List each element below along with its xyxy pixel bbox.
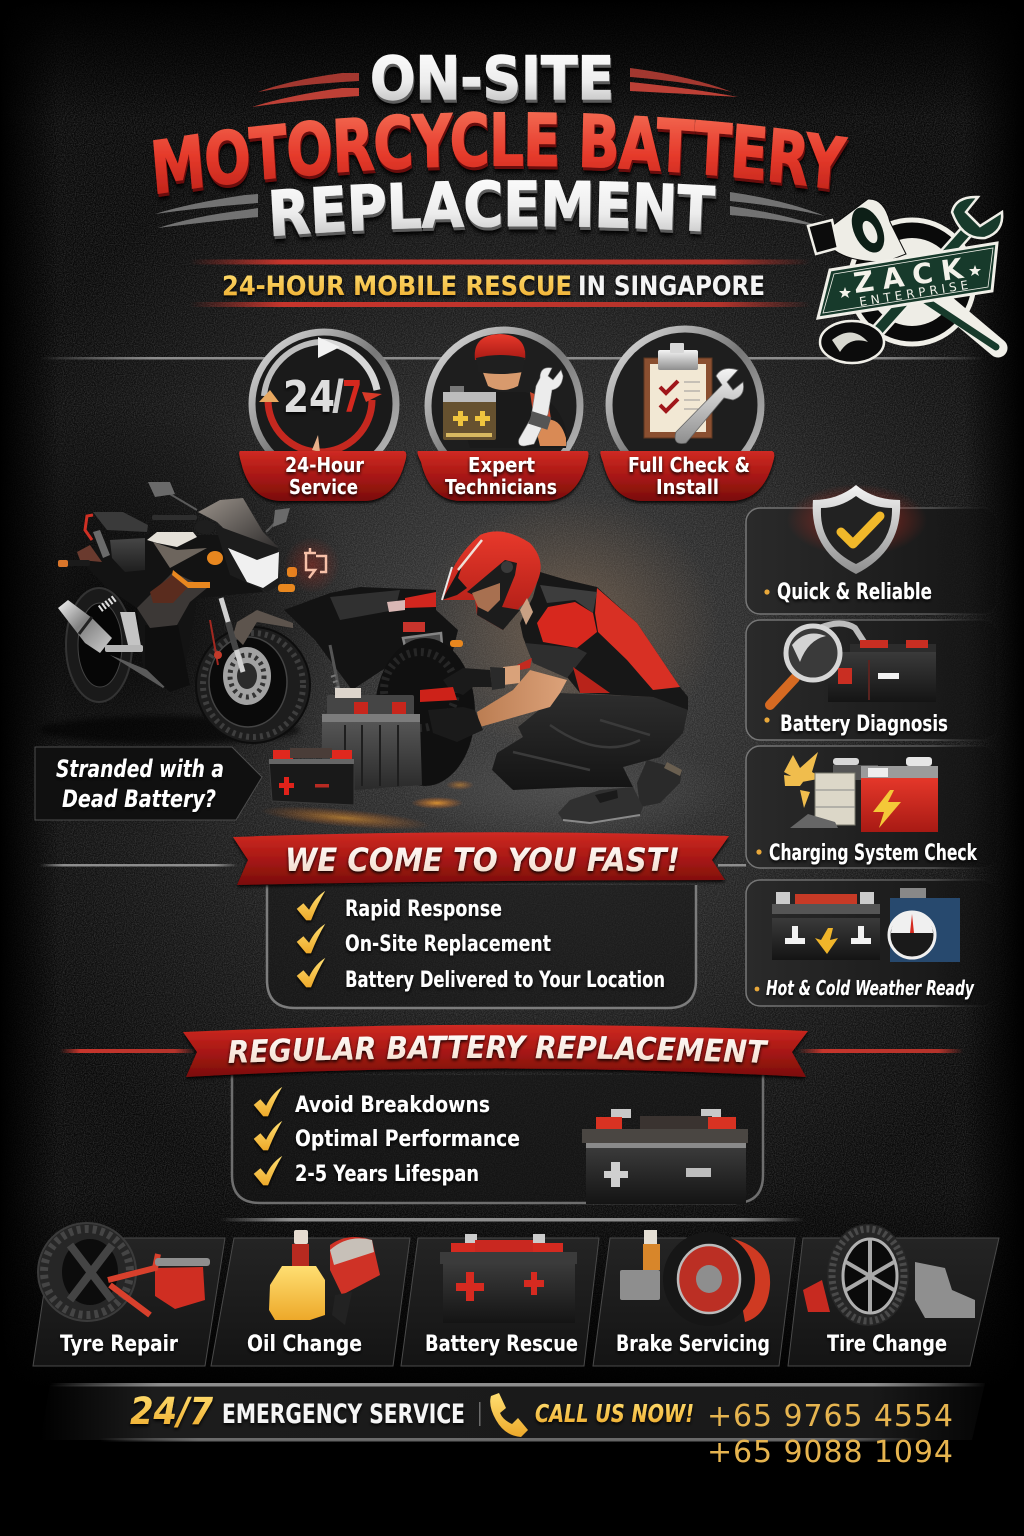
back boot — [637, 760, 682, 807]
near arm — [477, 670, 567, 727]
exhaust — [58, 600, 112, 653]
lower red — [573, 667, 610, 693]
card: Battery Rescue — [401, 1234, 599, 1366]
badge: 24-Hour Service — [239, 332, 406, 501]
heading: REPLACEMENT: REPLACEMENT — [271, 180, 718, 244]
upper white fairing — [147, 532, 197, 547]
grey shoulder — [540, 585, 597, 613]
grey glossy fairing — [137, 572, 207, 628]
fork — [221, 598, 243, 672]
badge: 24-Hour Service: / — [332, 370, 344, 422]
icon: clock arrows — [259, 337, 382, 452]
nose — [215, 525, 280, 592]
far arm — [503, 665, 520, 685]
subtitle band: IN SINGAPORE — [578, 271, 765, 302]
divider above services — [220, 1218, 805, 1222]
windshield — [198, 498, 278, 553]
panel: Battery Diagnosis — [746, 620, 996, 740]
badge: 24-Hour Service: Service — [289, 475, 358, 499]
tool: piston and handle — [808, 199, 998, 348]
card: Tire Change — [788, 1224, 999, 1366]
card: Brake Servicing — [593, 1230, 795, 1366]
battery: small — [269, 748, 354, 805]
emergency text: 24/7 — [130, 1390, 213, 1433]
logo banner — [818, 243, 997, 318]
shock — [100, 598, 115, 609]
badge: Full Check & Install: Install — [656, 475, 719, 499]
panel: benefits — [232, 1075, 763, 1204]
tool: wrench — [874, 197, 1002, 335]
shirt base — [520, 572, 688, 710]
grab rail — [85, 515, 93, 540]
banner: regular battery replacement: REGULAR BATTERY REPLACEMENT — [226, 1034, 770, 1067]
check items — [297, 891, 325, 987]
logo: Zack Enterprise: ENTERPRISE — [858, 278, 969, 309]
panel: checklist: Rapid Response — [345, 897, 502, 922]
icon: battery — [465, 1234, 477, 1244]
red back panel — [595, 588, 680, 690]
far sleeve — [517, 658, 532, 670]
contact bar: EMERGENCY SERVICE — [222, 1399, 465, 1430]
orange indicators — [172, 551, 297, 592]
tail panel — [77, 545, 102, 562]
panel: Charging System Check — [746, 746, 996, 868]
panel: Hot & Cold Weather Ready — [746, 880, 996, 1006]
parked rear of second bike — [284, 587, 475, 786]
badge: 24-Hour Service: 7 — [342, 372, 362, 423]
logo wordmark: ZACK — [851, 252, 966, 300]
panel: Battery Diagnosis: Battery Diagnosis — [780, 712, 948, 737]
banner: we come to you fast — [233, 832, 729, 885]
badge: Expert Technicians: Technicians — [445, 475, 557, 499]
panel: Quick & Reliable — [746, 484, 996, 614]
grey swooshes beside REPLACEMENT — [155, 192, 825, 228]
seat — [93, 512, 148, 532]
icon: magnifier and battery — [815, 623, 866, 645]
ring behind tools — [850, 220, 974, 344]
mirrors — [148, 482, 290, 532]
contact bar: CALL US NOW! — [535, 1399, 694, 1428]
panel: checklist: On-Site Replacement — [345, 932, 551, 957]
warm light behind mechanic — [420, 495, 720, 755]
icon: phone — [490, 1393, 528, 1437]
floor tone — [400, 740, 740, 840]
contact bar — [40, 1383, 985, 1470]
panel: Quick & Reliable: Quick & Reliable — [777, 580, 932, 605]
rear wheel — [66, 588, 132, 702]
callout: stranded: Dead Battery? — [62, 785, 216, 813]
subtitle band — [190, 260, 810, 307]
battery: large — [322, 688, 422, 790]
motorcycle — [40, 482, 310, 744]
subtitle band: 24-HOUR MOBILE RESCUE — [222, 271, 572, 302]
headlight — [228, 548, 279, 588]
callout: stranded — [35, 747, 262, 820]
red speed swooshes beside ON-SITE — [252, 68, 738, 107]
belly pan — [110, 655, 172, 688]
banner: we come to you fast: WE COME TO YOU FAST! — [285, 841, 680, 879]
section: we come to you fast — [40, 832, 746, 1008]
logo: Zack Enterprise — [808, 197, 1002, 363]
badge: 24-Hour Service: 24 — [283, 372, 335, 423]
side feature panels — [746, 484, 996, 1006]
badge: Expert Technicians — [417, 330, 588, 501]
services row — [33, 1223, 999, 1366]
footpeg and bracket — [120, 612, 142, 652]
silver divider — [40, 357, 985, 360]
feature badges — [239, 329, 774, 501]
card: Tyre Repair — [33, 1223, 225, 1366]
card: Brake Servicing: Brake Servicing — [616, 1332, 770, 1357]
icon: battery warning light — [284, 537, 340, 593]
red chest panel — [537, 602, 597, 648]
callout: stranded: Stranded with a — [56, 755, 224, 783]
badge: 24-Hour Service: 24-Hour — [285, 453, 364, 477]
icon: oil bottle — [294, 1230, 308, 1244]
badge: Full Check & Install — [600, 329, 774, 501]
icon: wheel and jack — [803, 1280, 830, 1312]
icon: battery and gauge — [776, 892, 790, 904]
tail and main black body — [80, 535, 263, 692]
heading: MOTORCYCLE BATTERY: MOTORCYCLE BATTERY — [153, 111, 850, 200]
panel: benefits: 2-5 Years Lifespan — [295, 1162, 479, 1187]
title block — [153, 44, 850, 244]
handlebar — [152, 515, 197, 520]
front wheel — [196, 627, 310, 743]
lower glove — [428, 707, 483, 742]
icon: brake disc — [730, 1238, 770, 1322]
icon: shield — [813, 485, 900, 574]
card: Oil Change — [211, 1230, 410, 1366]
card: Tire Change: Tire Change — [827, 1332, 947, 1357]
front fender — [233, 610, 293, 645]
mechanic — [420, 531, 688, 823]
icon: charging system — [784, 752, 823, 808]
icon: technician — [443, 334, 567, 448]
upper glove — [443, 668, 492, 695]
helmet — [442, 531, 541, 630]
battery — [443, 398, 496, 440]
red terminal tool — [420, 687, 457, 702]
tool: helmet outline — [820, 321, 884, 363]
wrench held — [519, 368, 563, 446]
icon: tyre and tool — [38, 1223, 136, 1321]
trousers — [492, 693, 688, 790]
sleeve — [525, 643, 587, 678]
badge: Expert Technicians: Expert — [468, 453, 535, 477]
panel: benefits: Optimal Performance — [295, 1127, 520, 1152]
badge: Full Check & Install: Full Check & — [628, 453, 750, 477]
panel: checklist — [267, 885, 696, 1008]
section: regular battery replacement — [61, 1024, 962, 1204]
front boot — [558, 787, 643, 823]
panel: benefits: Avoid Breakdowns — [295, 1093, 490, 1118]
banner: regular battery replacement — [183, 1024, 808, 1080]
hero illustration: mechanic and motorcycle — [40, 482, 740, 840]
card: Tyre Repair: Tyre Repair — [60, 1332, 178, 1357]
heading: ON-SITE: ON-SITE — [370, 44, 614, 114]
phone numbers: +65 9765 4554 — [707, 1399, 953, 1434]
contact bar: +65 9088 1094 — [707, 1435, 953, 1470]
floor glow — [260, 780, 474, 834]
panel: checklist: Battery Delivered to Your Location — [345, 968, 665, 993]
icon: clipboard and wrench — [644, 343, 744, 444]
card: Battery Rescue: Battery Rescue — [425, 1332, 578, 1357]
icon: battery — [582, 1109, 748, 1204]
card: Oil Change: Oil Change — [247, 1332, 362, 1357]
